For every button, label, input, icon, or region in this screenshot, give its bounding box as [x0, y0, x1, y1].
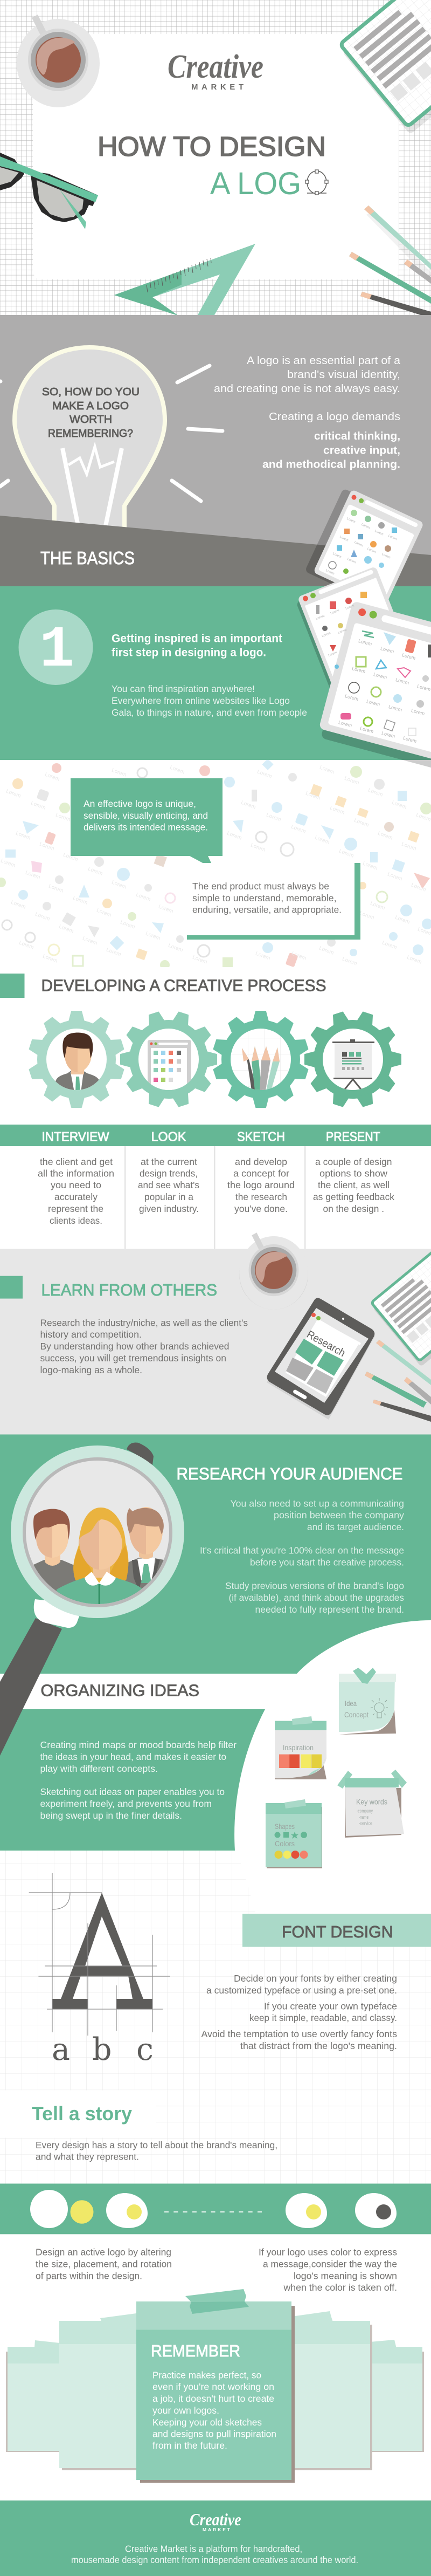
- question text: REMEMBERING?: [48, 427, 133, 440]
- dark sloped band: [0, 516, 431, 586]
- panel: step 1 inspiration: [0, 586, 431, 760]
- body text: [200, 1498, 404, 1615]
- text: sketch: a concept for: [233, 1168, 289, 1179]
- logos on browser 2: Lorem: [338, 628, 347, 635]
- intro text: and methodical planning.: [262, 458, 400, 470]
- text: look: given industry.: [139, 1203, 199, 1214]
- panel: faded logo pattern: Lorem: [15, 831, 31, 841]
- heading: LEARN FROM OTHERS: [41, 1280, 217, 1299]
- panel: faded logo pattern: Lorem: [111, 880, 127, 890]
- text: color logo: If your logo uses color to express: [259, 2247, 397, 2258]
- white title card: [33, 34, 399, 279]
- note: inspiration: Inspiration: [283, 1743, 314, 1752]
- panel: faded logo pattern: Lorem: [342, 956, 358, 967]
- panel: faded logo pattern: Lorem: [370, 901, 386, 912]
- text: present: options to show: [319, 1168, 387, 1179]
- logos on browser 2: Lorem: [316, 614, 325, 621]
- logo: footer Creative Market: Creative: [190, 2510, 241, 2529]
- icon: letter A construction: c: [136, 2032, 154, 2067]
- body text: Sketching out ideas on paper enables you to: [40, 1786, 225, 1797]
- callout: end product: simple to understand, memorable,: [192, 893, 336, 903]
- callout: effective logo speech bubble: sensible, visually enticing, and: [84, 810, 208, 821]
- label band: INTERVIEW: [42, 1130, 109, 1145]
- panel: faded logo pattern: Lorem: [44, 772, 60, 783]
- panel: faded logo pattern: Lorem: [359, 910, 375, 921]
- text: look: design trends,: [140, 1168, 198, 1179]
- panel: faded logo pattern: Lorem: [25, 870, 41, 881]
- panel: faded logo pattern: Lorem: [256, 769, 273, 780]
- panel: font design and stories grid background: [0, 1851, 431, 2183]
- panel: faded logo pattern: Lorem: [34, 912, 51, 922]
- text: color logo: [259, 2247, 397, 2293]
- body text: (if available), and think about the upgrades: [228, 1592, 404, 1603]
- text: interview: the client and get: [40, 1156, 113, 1167]
- icon: magnifying glass with audience: [0, 1442, 184, 1756]
- icon: no-color version: [355, 2193, 397, 2228]
- logos on browser 2: Lorem: [345, 604, 355, 611]
- footer text: Creative Market is a platform for handcrafted,: [125, 2544, 302, 2554]
- heading: DEVELOPING A CREATIVE PROCESS: [41, 976, 326, 995]
- logos on browser 1: Lorem: [366, 547, 376, 554]
- logos on browser 3: Lorem: [388, 704, 402, 712]
- intro text: [214, 355, 401, 470]
- body text: the ideas in your head, and makes it easier to: [40, 1751, 226, 1762]
- text: look: [138, 1156, 199, 1214]
- icon: combined shape: [106, 2193, 148, 2228]
- callout: end product: The end product must always be: [192, 881, 329, 892]
- logos on browser 3: Lorem: [358, 638, 372, 647]
- panel: faded logo pattern: Lorem: [168, 943, 184, 954]
- panel: faded logo pattern: Lorem: [192, 955, 208, 965]
- body text: before you start the creative process.: [250, 1557, 404, 1567]
- panel: faded logo pattern: Lorem: [62, 852, 79, 863]
- heading: remember: REMEMBER: [151, 2341, 240, 2360]
- text: interview: you need to: [51, 1180, 101, 1190]
- panel: faded logo pattern: Lorem: [290, 824, 307, 835]
- icon: research tablet: Research: [305, 1328, 347, 1359]
- text: look: popular in a: [144, 1191, 193, 1202]
- panel: faded logo pattern: Lorem: [387, 872, 403, 882]
- panel: faded logo pattern: Lorem: [10, 900, 26, 910]
- panel: faded logo pattern: Lorem: [87, 866, 103, 877]
- panel: organizing ideas: [0, 1668, 407, 1868]
- text: tell a story: [36, 2140, 277, 2162]
- panel: faded logo pattern: Lorem: [82, 936, 98, 947]
- logos on browser 1: Lorem: [332, 552, 342, 559]
- text: font design: [201, 1973, 397, 2051]
- step text: Getting inspired is an important: [112, 632, 282, 645]
- text: tell a story: Every design has a story to tell about the brand's meaning,: [36, 2140, 277, 2150]
- logos on browser 1: Lorem: [387, 535, 397, 541]
- panel: faded logo pattern: Lorem: [111, 768, 127, 778]
- panel: faded logo pattern: Lorem: [30, 800, 46, 811]
- logos on browser 3: Lorem: [344, 693, 359, 702]
- panel: research your audience: [0, 1435, 431, 1674]
- panel: faded logo pattern: Lorem: [18, 940, 34, 951]
- step text: Everywhere from online websites like Logo: [112, 695, 290, 706]
- icon: notebook: [337, 0, 431, 134]
- panel: faded logo pattern: Lorem: [145, 931, 161, 942]
- footer text: mousemade design content from independent creatives around the world.: [71, 2554, 358, 2565]
- icon: pencils: [349, 205, 431, 318]
- panel: header with graph paper: [0, 0, 431, 318]
- logos on browser 3: Lorem: [401, 652, 416, 661]
- icon: white ellipse and yellow dot: [30, 2190, 94, 2228]
- intro text: A logo is an essential part of a: [247, 355, 401, 367]
- panel: faded logo pattern: Lorem: [158, 904, 174, 915]
- text: color logo: logo's meaning is shown: [294, 2270, 397, 2281]
- icon: bulb rays: [0, 366, 223, 501]
- text: color logo: when the color is taken off.: [283, 2282, 397, 2293]
- text: font design: a customized typeface or using a pre-set one.: [206, 1985, 397, 1996]
- panel: faded logo pattern: Lorem: [39, 841, 55, 852]
- panel: faded logo pattern: Lorem: [5, 789, 22, 799]
- logos on browser 3: Lorem: [381, 730, 395, 739]
- body text: and its target audience.: [307, 1522, 404, 1532]
- text: tell a story: and what they represent.: [36, 2151, 139, 2162]
- intro text: critical thinking,: [314, 430, 400, 442]
- note: key words: -company: [357, 1808, 373, 1813]
- panel: faded logo pattern: Lorem: [338, 848, 354, 859]
- accent square: [0, 1276, 23, 1299]
- panel: faded logo pattern: Lorem: [406, 955, 422, 965]
- heading band: font design: [242, 1914, 431, 1947]
- body text: By understanding how other brands achieved: [40, 1341, 230, 1352]
- heading: RESEARCH YOUR AUDIENCE: [177, 1464, 403, 1483]
- text: remember: Practice makes perfect, so: [152, 2369, 261, 2380]
- panel: faded logo pattern: Lorem: [48, 883, 64, 894]
- note: key words: Key words: [356, 1798, 387, 1806]
- heading: ORGANIZING IDEAS: [41, 1681, 199, 1700]
- logo: Creative Market: Creative: [168, 49, 263, 85]
- intro text: and creating one is not always easy.: [214, 383, 400, 395]
- logos on browser 3: Lorem: [395, 677, 409, 686]
- callout: effective logo speech bubble: delivers its intended message.: [84, 822, 208, 833]
- panel: faded logo pattern: Lorem: [411, 882, 427, 893]
- panel: faded logo pattern: Lorem: [0, 858, 16, 869]
- browser window 1: [304, 486, 424, 608]
- panel: developing a creative process: [0, 974, 431, 1249]
- logos on browser 3: Lorem: [380, 646, 394, 654]
- text: remember: from in the future.: [152, 2440, 227, 2451]
- logos on browser 3: Lorem: [402, 735, 417, 744]
- body text: position between the company: [274, 1510, 404, 1520]
- panel: faded logo pattern: Lorem: [362, 861, 378, 872]
- audience people: [32, 1507, 164, 1610]
- center note: [136, 2289, 295, 2483]
- accent square: [0, 974, 25, 998]
- text: present: on the design .: [323, 1203, 384, 1214]
- text: remember: your own logos.: [152, 2405, 219, 2416]
- text: present: the client, as well: [318, 1180, 390, 1190]
- text: active logo: of parts within the design.: [36, 2270, 142, 2281]
- text: look: at the current: [141, 1156, 197, 1167]
- text: remember: [152, 2369, 276, 2451]
- note: shapes and colors: Colors: [275, 1839, 295, 1848]
- panel: faded logo pattern: Lorem: [250, 842, 266, 853]
- logos on browser 1: Lorem: [374, 530, 384, 536]
- text: active logo: Design an active logo by altering: [36, 2247, 171, 2258]
- panel: faded logo pattern: Lorem: [318, 946, 335, 956]
- panel: faded logo pattern: Lorem: [305, 791, 321, 801]
- gear: present: [304, 1012, 401, 1107]
- icon: browser windows with logos: [294, 486, 431, 771]
- panel: faded logo pattern: Lorem: [401, 841, 417, 852]
- callout: end product: enduring, versatile, and appropriate.: [192, 904, 342, 915]
- panel: faded logo pattern: Lorem: [55, 812, 71, 823]
- panel: intro grey: [0, 315, 431, 586]
- text: interview: all the information: [38, 1168, 114, 1179]
- logos on browser 1: Lorem: [360, 523, 370, 530]
- note: inspiration: [275, 1716, 326, 1779]
- note: shapes and colors: [266, 1799, 322, 1868]
- panel: faded logo pattern: Lorem: [291, 951, 307, 962]
- icon: letter A construction: b: [92, 2032, 112, 2067]
- intro text: brand's visual identity,: [287, 369, 400, 381]
- panel: faded logo pattern: Lorem: [42, 954, 58, 964]
- text: interview: clients ideas.: [50, 1215, 102, 1226]
- panel: faded logo pattern: Lorem: [96, 908, 112, 919]
- middle notes: [59, 2311, 372, 2470]
- panel: faded logo pattern: Lorem: [120, 920, 136, 930]
- intro text: creative input,: [323, 444, 400, 456]
- icon: letter A construction: [29, 1873, 170, 2067]
- text: present: a couple of design: [315, 1156, 392, 1167]
- text: remember: and designs to pull inspiration: [152, 2428, 276, 2439]
- dashed connector: [164, 2211, 263, 2212]
- heading band: font design: FONT DESIGN: [282, 1922, 393, 1941]
- panel: footer: [0, 2500, 431, 2576]
- label band: [0, 1125, 431, 1146]
- note: key words: [337, 1770, 407, 1838]
- gear: sketch: [213, 1011, 309, 1107]
- icon: light bulb: [15, 347, 165, 531]
- body text: needed to fully represent the brand.: [255, 1604, 404, 1615]
- step text: first step in designing a logo.: [112, 646, 266, 659]
- panel: faded logo pattern: Lorem: [255, 951, 271, 962]
- panel: faded logo pattern: [0, 759, 431, 970]
- green text panel: [0, 1709, 265, 1851]
- question text: WORTH: [69, 413, 112, 426]
- panel: faded logo pattern: Lorem: [353, 818, 370, 828]
- text: interview: [38, 1156, 114, 1226]
- note: key words: -service: [359, 1821, 372, 1826]
- question text: MAKE A LOGO: [52, 400, 129, 412]
- number badge: 1: [39, 618, 74, 683]
- panel: faded logo pattern: Lorem: [314, 835, 330, 846]
- body text: play with different concepts.: [40, 1763, 158, 1774]
- text: active logo: [36, 2247, 172, 2281]
- logos on browser 2: [316, 592, 367, 669]
- logos on browser 3: Lorem: [351, 666, 366, 674]
- gear: look: [120, 1012, 217, 1107]
- icon: letter A construction: a: [52, 2032, 70, 2067]
- text: remember: even if you're not working on: [152, 2381, 274, 2392]
- panel: faded logo pattern: Lorem: [169, 765, 185, 776]
- panel: faded logo pattern: Lorem: [377, 831, 393, 841]
- text: color logo: a message,consider the way the: [263, 2259, 397, 2270]
- callout: end product: [183, 863, 360, 940]
- logos on browser 1: Lorem: [346, 517, 356, 524]
- text: present: as getting feedback: [313, 1191, 394, 1202]
- logos on browser 2: Lorem: [330, 609, 340, 615]
- question text: SO, HOW DO YOU: [42, 386, 140, 398]
- label band: LOOK: [151, 1130, 186, 1145]
- body text: Creating mind maps or mood boards help filter: [40, 1739, 237, 1750]
- text: font design: that distract from the logo's meaning.: [240, 2040, 397, 2051]
- body text: You also need to set up a communicating: [231, 1498, 404, 1509]
- logos on browser 3: Lorem: [411, 708, 425, 716]
- icon: set square ruler: [114, 244, 255, 315]
- text: font design: Avoid the temptation to use overtly fancy fonts: [201, 2029, 397, 2039]
- icon: colored version: [286, 2193, 327, 2228]
- icon: pencils: [365, 1340, 431, 1422]
- note: idea concept: Idea: [345, 1699, 357, 1708]
- logos on browser 3: Lorem: [416, 683, 431, 692]
- body text: [40, 1739, 237, 1821]
- panel: faded logo pattern: Lorem: [240, 800, 256, 811]
- panel: faded logo pattern: Lorem: [391, 800, 407, 811]
- body text: Study previous versions of the brand's logo: [225, 1580, 404, 1591]
- label band: SKETCH: [237, 1130, 285, 1145]
- logos on browser 2: Lorem: [322, 632, 331, 638]
- icon: notebook: [370, 1237, 431, 1367]
- panel: faded logo pattern: Lorem: [226, 831, 242, 841]
- heading: tell a story: Tell a story: [32, 2102, 132, 2125]
- logos on browser 1: Lorem: [346, 558, 356, 564]
- note: key words: -name: [359, 1814, 369, 1820]
- logos on browser 3: Lorem: [359, 725, 374, 734]
- panel: faded logo pattern: Lorem: [381, 940, 398, 951]
- panel: faded logo pattern: Lorem: [319, 765, 335, 776]
- panel: faded logo pattern: Lorem: [329, 805, 345, 816]
- body text: experiment freely, and prevents you from: [40, 1798, 212, 1809]
- body text: [40, 1317, 248, 1375]
- panel: egg shapes band: [0, 2183, 431, 2234]
- logo: footer Creative Market: MARKET: [203, 2527, 231, 2532]
- panel: faded logo pattern: Lorem: [135, 892, 151, 903]
- logos on browser 3: Lorem: [338, 720, 352, 728]
- footer text: [71, 2544, 358, 2565]
- note: idea concept: Concept: [344, 1710, 369, 1719]
- body text: logo-making as a whole.: [40, 1365, 142, 1375]
- text: font design: keep it simple, readable, and classy.: [249, 2012, 397, 2023]
- body text: history and competition.: [40, 1329, 142, 1340]
- body text: Research the industry/niche, as well as the client's: [40, 1317, 248, 1328]
- number badge: [18, 609, 93, 685]
- panel: remember sticky notes: [6, 2289, 424, 2483]
- text: look: and see what's: [138, 1180, 199, 1190]
- step text: Gala, to things in nature, and even from people: [112, 707, 307, 718]
- label band: PRESENT: [326, 1130, 380, 1145]
- text: remember: a job, it doesn't hurt to create: [152, 2393, 274, 2404]
- text: font design: If you create your own typeface: [264, 2001, 397, 2012]
- text: present: [313, 1156, 394, 1214]
- icon: coffee cup: [17, 15, 100, 107]
- logos on browser 1: Lorem: [381, 553, 391, 559]
- text: remember: Keeping your old sketches: [152, 2417, 262, 2428]
- panel: faded logo pattern: Lorem: [367, 787, 384, 798]
- panel: faded logo pattern: Lorem: [394, 915, 411, 926]
- gear: interview: [29, 1011, 124, 1107]
- text: interview: represent the: [48, 1203, 103, 1214]
- step text: You can find inspiration anywhere!: [112, 683, 255, 694]
- body text: being swept up in the finer details.: [40, 1810, 182, 1821]
- panel: faded logo pattern: Lorem: [72, 895, 88, 906]
- question text: [42, 386, 140, 440]
- callout: effective logo speech bubble: [71, 778, 223, 869]
- text: sketch: you've done.: [234, 1203, 288, 1214]
- logos on browser 2: Lorem: [328, 651, 338, 657]
- callout: effective logo speech bubble: An effective logo is unique,: [84, 798, 196, 809]
- text: interview: accurately: [54, 1191, 98, 1202]
- icon: glasses: [0, 153, 98, 229]
- logos on browser 1: [325, 510, 397, 576]
- logos on browser 3: Lorem: [366, 698, 380, 707]
- body text: It's critical that you're 100% clear on the message: [200, 1545, 404, 1556]
- icon: coffee cup: [239, 1232, 308, 1310]
- text: sketch: [227, 1156, 295, 1214]
- logos on browser 1: Lorem: [325, 569, 335, 576]
- text: font design: Decide on your fonts by either creating: [234, 1973, 397, 1984]
- panel: faded logo pattern: Lorem: [266, 812, 282, 823]
- logos on browser 1: Lorem: [353, 541, 363, 547]
- step text: [112, 632, 307, 718]
- panel: faded logo pattern: Lorem: [106, 947, 122, 958]
- title: HOW TO DESIGN: [98, 131, 326, 162]
- logos on browser 3: Lorem: [373, 672, 387, 680]
- note: idea concept: [339, 1668, 396, 1735]
- title: [98, 131, 328, 201]
- heading: the basics: THE BASICS: [40, 548, 135, 568]
- panel: faded logo pattern: Lorem: [58, 924, 74, 935]
- note: shapes and colors: Shapes: [275, 1822, 295, 1831]
- browser window 3: [316, 601, 431, 771]
- panel: learn from others: [0, 1232, 431, 1435]
- text: sketch: the logo around: [227, 1180, 295, 1190]
- logo: Creative Market: MARKET: [191, 83, 244, 92]
- panel: faded logo pattern: Lorem: [344, 776, 360, 786]
- logos on browser 3: [338, 631, 431, 744]
- browser window 2: [294, 566, 413, 694]
- outer notes: [6, 2340, 424, 2452]
- text: sketch: the research: [235, 1191, 287, 1202]
- text: active logo: the size, placement, and rotation: [36, 2259, 172, 2270]
- text: sketch: and develop: [235, 1156, 287, 1167]
- intro text: Creating a logo demands: [269, 411, 400, 423]
- body text: success, you will get tremendous insights on: [40, 1353, 226, 1364]
- title: A LOG: [210, 166, 301, 201]
- logos on browser 1: Lorem: [339, 536, 349, 542]
- icon: research tablet: [267, 1298, 375, 1420]
